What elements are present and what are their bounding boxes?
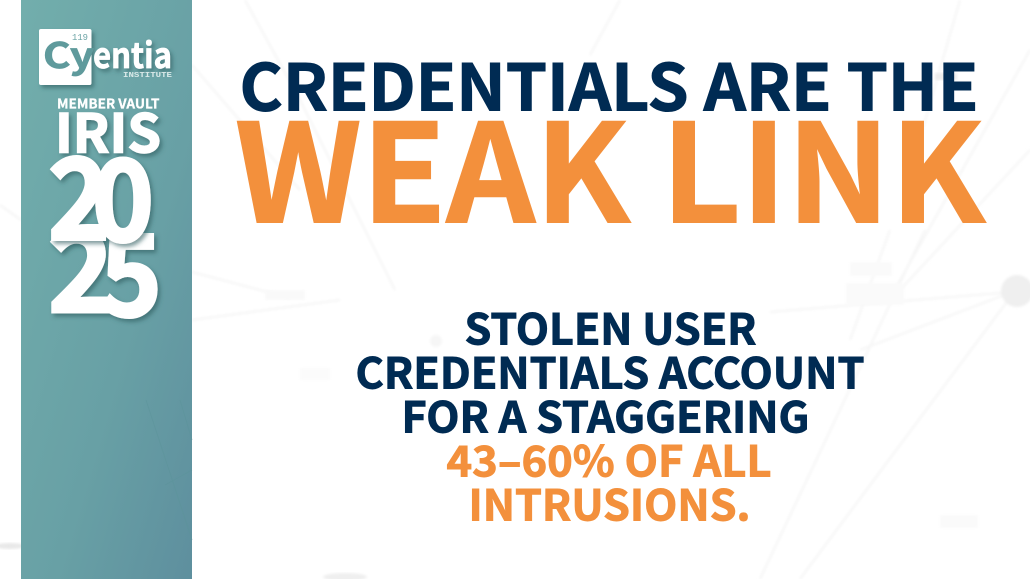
logo: Cyentia Institute: 119 xyxy=(72,33,88,43)
label: year 2025: 2 xyxy=(48,181,114,345)
label: IRIS: IRIS xyxy=(55,92,161,168)
logo: Cyentia Institute: Cy xyxy=(43,28,94,79)
text block: statistic statement xyxy=(356,297,864,534)
text block: statistic statement: FOR A STAGGERING xyxy=(402,385,810,446)
label: member vault: MEMBER VAULT xyxy=(57,92,160,112)
label: year 2025: 0 xyxy=(92,110,154,274)
text block: statistic statement: 43–60% OF ALL xyxy=(446,429,772,490)
text block: statistic statement: INTRUSIONS. xyxy=(468,473,750,534)
text block: statistic statement: STOLEN USER xyxy=(464,297,756,358)
logo: Cyentia Institute xyxy=(39,28,173,85)
logo: Cyentia Institute: entia xyxy=(93,28,172,79)
text block: statistic statement: CREDENTIALS ACCOUNT xyxy=(356,341,864,402)
heading: weak link: WEAK LINK xyxy=(235,65,986,262)
label: year 2025: 2 xyxy=(48,108,110,272)
label: year 2025 xyxy=(48,108,162,349)
logo: Cyentia Institute: INSTITUTE xyxy=(123,72,173,80)
panel: teal sidebar xyxy=(21,0,192,579)
label: year 2025: 5 xyxy=(100,185,162,349)
heading: credentials are the: CREDENTIALS ARE THE xyxy=(240,38,979,130)
